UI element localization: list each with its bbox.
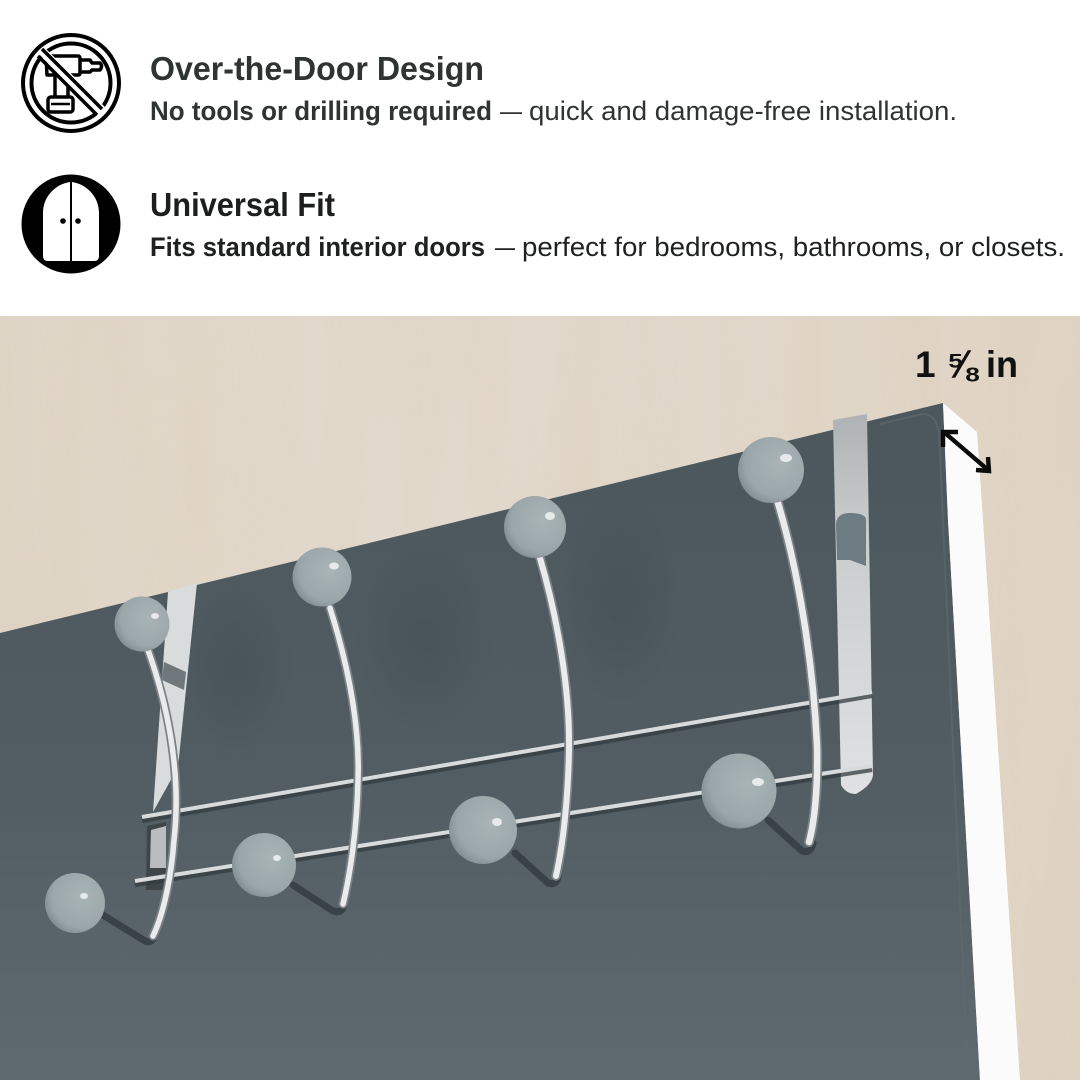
door edge — [943, 403, 1020, 1080]
text block: no tools: — — [500, 96, 522, 126]
wood wall — [0, 316, 1080, 1080]
icon: door — [22, 174, 120, 274]
dimension label: in — [986, 344, 1018, 385]
dimension label: 1 — [915, 344, 936, 385]
text block: no tools — [150, 96, 957, 126]
text block: no tools: quick and damage-free installation. — [529, 96, 957, 126]
upper rod — [142, 692, 872, 820]
door panel — [0, 403, 980, 1080]
hook 3 — [515, 558, 569, 884]
text block: no tools: No tools or drilling required — [150, 96, 492, 126]
ball knobs — [45, 437, 804, 933]
lower rod — [135, 766, 872, 884]
right bracket — [833, 414, 873, 794]
hook 1 — [103, 650, 176, 942]
heading: over-the-door design: Over-the-Door Design — [150, 50, 484, 87]
heading: universal fit: Universal Fit — [150, 186, 335, 223]
text block: fits standard doors — [150, 232, 1065, 262]
arrow: door thickness — [943, 432, 989, 471]
hook 2 — [293, 608, 358, 912]
hook 4 — [768, 503, 817, 852]
dimension label — [915, 343, 1018, 387]
dimension label: ⅝ — [946, 343, 979, 387]
text block: fits standard doors: Fits standard interior doors — [150, 232, 485, 262]
text block: fits standard doors: perfect for bedrooms, bathrooms, or closets. — [522, 232, 1065, 262]
left bracket — [146, 583, 197, 890]
icon: no drilling — [23, 35, 119, 131]
text block: fits standard doors: — — [495, 232, 515, 262]
